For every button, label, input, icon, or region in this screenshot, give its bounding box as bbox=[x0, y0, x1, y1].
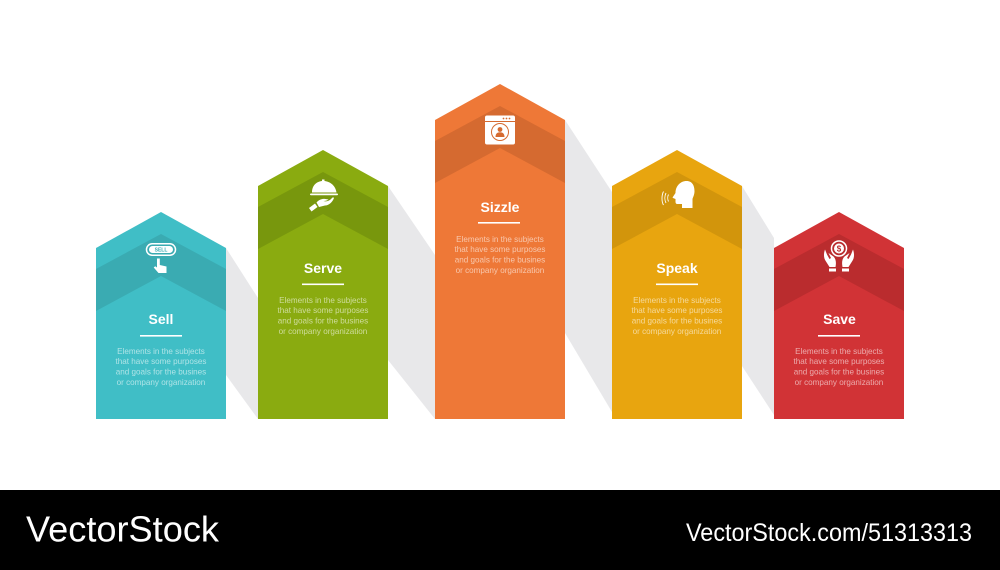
text: Save description: that have some purposes bbox=[794, 357, 884, 366]
text: Serve description: and goals for the busines bbox=[278, 316, 368, 326]
shadow: speak bbox=[742, 186, 774, 415]
footer logo text: VectorStock bbox=[26, 508, 220, 550]
text: Save description: or company organization bbox=[795, 378, 883, 387]
text: Serve description: or company organization bbox=[279, 327, 367, 336]
shadow: sizzle bbox=[565, 120, 612, 412]
text: Sizzle description: that have some purposes bbox=[455, 245, 545, 254]
text: Sizzle description: or company organization bbox=[456, 266, 544, 275]
heading: Sell: Sell bbox=[149, 311, 173, 327]
panel: Speak bbox=[612, 150, 742, 419]
icon: browser window with user bbox=[485, 116, 515, 144]
icon: serving cloche and hand bbox=[309, 180, 338, 212]
text: Speak description: that have some purposes bbox=[632, 306, 722, 315]
panel: Sell bbox=[96, 212, 226, 419]
panel: Serve bbox=[258, 150, 388, 419]
icon: hands holding coin bbox=[824, 241, 854, 272]
text: Sell description: or company organization bbox=[117, 378, 205, 387]
icon: speaking head bbox=[662, 181, 694, 208]
footer url text: VectorStock.com/51313313 bbox=[686, 519, 972, 547]
icon: sell button and hand: SELL bbox=[155, 248, 167, 254]
text: Sell description: Elements in the subjects bbox=[117, 347, 205, 356]
heading: Serve: Serve bbox=[304, 260, 342, 276]
text: Save description: Elements in the subjects bbox=[795, 347, 883, 356]
panel: Save bbox=[774, 212, 904, 419]
shadow: serve bbox=[388, 186, 435, 419]
text: Serve description: that have some purposes bbox=[278, 306, 368, 315]
heading: Speak: Speak bbox=[656, 260, 698, 276]
text: Sell description: that have some purposes bbox=[116, 357, 206, 366]
text: Sizzle description: Elements in the subjects bbox=[456, 235, 544, 244]
footer bar bbox=[0, 490, 1000, 570]
shadow: sell bbox=[226, 248, 258, 419]
icon: sell button and hand bbox=[146, 244, 176, 273]
text: Speak description: or company organization bbox=[633, 327, 721, 336]
heading: Sizzle: Sizzle bbox=[481, 199, 520, 215]
text: Sell description: and goals for the busines bbox=[116, 368, 206, 376]
text: Speak description: Elements in the subjects bbox=[633, 296, 721, 305]
heading: Save: Save bbox=[823, 311, 856, 327]
icon: hands holding coin: $ bbox=[837, 244, 842, 254]
panel: Sizzle bbox=[435, 84, 565, 419]
text: Sizzle description: and goals for the busines bbox=[455, 256, 545, 264]
text: Speak description: and goals for the busines bbox=[632, 316, 722, 326]
text: Serve description: Elements in the subjects bbox=[279, 296, 367, 305]
text: Save description: and goals for the busines bbox=[794, 368, 884, 376]
